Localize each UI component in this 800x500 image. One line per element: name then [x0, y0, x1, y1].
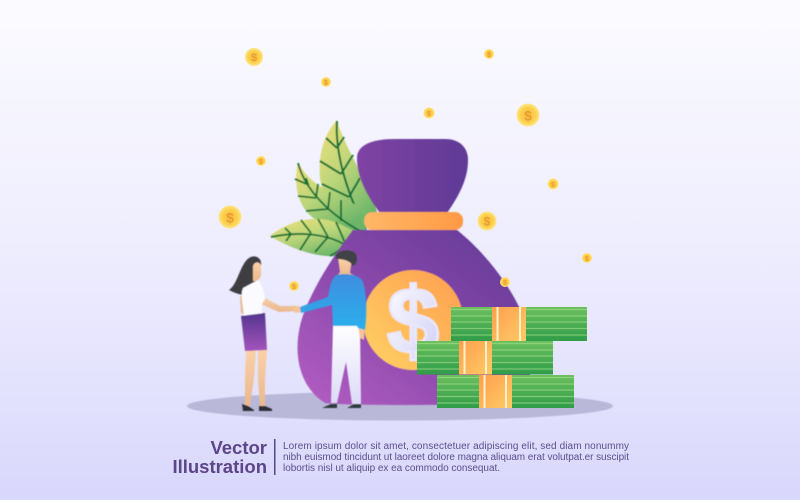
floating coins: $ [484, 214, 491, 228]
money bag [297, 139, 530, 405]
hand [292, 306, 302, 313]
body text [283, 441, 629, 474]
floating coins: $ [292, 284, 296, 291]
bag top [357, 139, 468, 213]
shoes [322, 404, 361, 408]
leaf: top [320, 120, 377, 234]
bag strap [364, 212, 463, 230]
neck and face [337, 258, 355, 276]
divider [274, 439, 276, 475]
face [253, 262, 261, 281]
stack: top [451, 307, 587, 341]
floating coins: $ [324, 80, 328, 87]
heading: Vector [210, 437, 267, 458]
man [292, 250, 366, 408]
legs [245, 350, 267, 406]
sweater [300, 274, 366, 330]
money stacks [417, 307, 587, 408]
heading [172, 437, 267, 477]
floating coins: $ [226, 210, 234, 226]
ground shadow [187, 392, 613, 420]
body text: lobortis nisl ut aliquip ex ea commodo consequat. [283, 463, 500, 474]
shoes [242, 404, 272, 411]
heading: Illustration [172, 456, 267, 477]
floating coins: $ [251, 52, 257, 64]
floating coins: $ [427, 111, 431, 118]
woman [229, 256, 297, 411]
arm left [240, 296, 245, 314]
plant leaves [270, 120, 377, 256]
leaf: middle [295, 162, 366, 232]
handshake arm [261, 297, 297, 312]
floating coins: $ [524, 108, 532, 124]
floating coins [218, 48, 592, 291]
stack: bottom [437, 375, 574, 408]
floating coins: $ [259, 159, 263, 166]
leaf: lower [270, 219, 362, 256]
floating coins: $ [503, 280, 507, 287]
body text: nibh euismod tincidunt ut laoreet dolore magna aliquam erat volutpat.er suscipit [283, 452, 629, 463]
hair [229, 256, 261, 296]
body text: Lorem ipsum dolor sit amet, consectetuer adipiscing elit, sed diam nonummy [283, 441, 629, 452]
big coin [363, 270, 463, 370]
skirt [241, 313, 267, 351]
blouse [242, 280, 265, 316]
dollar sign: $ [387, 268, 439, 373]
floating coins: $ [585, 256, 589, 263]
bag body [297, 230, 530, 405]
floating coins: $ [487, 52, 491, 59]
hair [336, 250, 357, 266]
floating coins: $ [551, 182, 555, 189]
stack: middle [417, 341, 553, 374]
legs [331, 325, 361, 404]
